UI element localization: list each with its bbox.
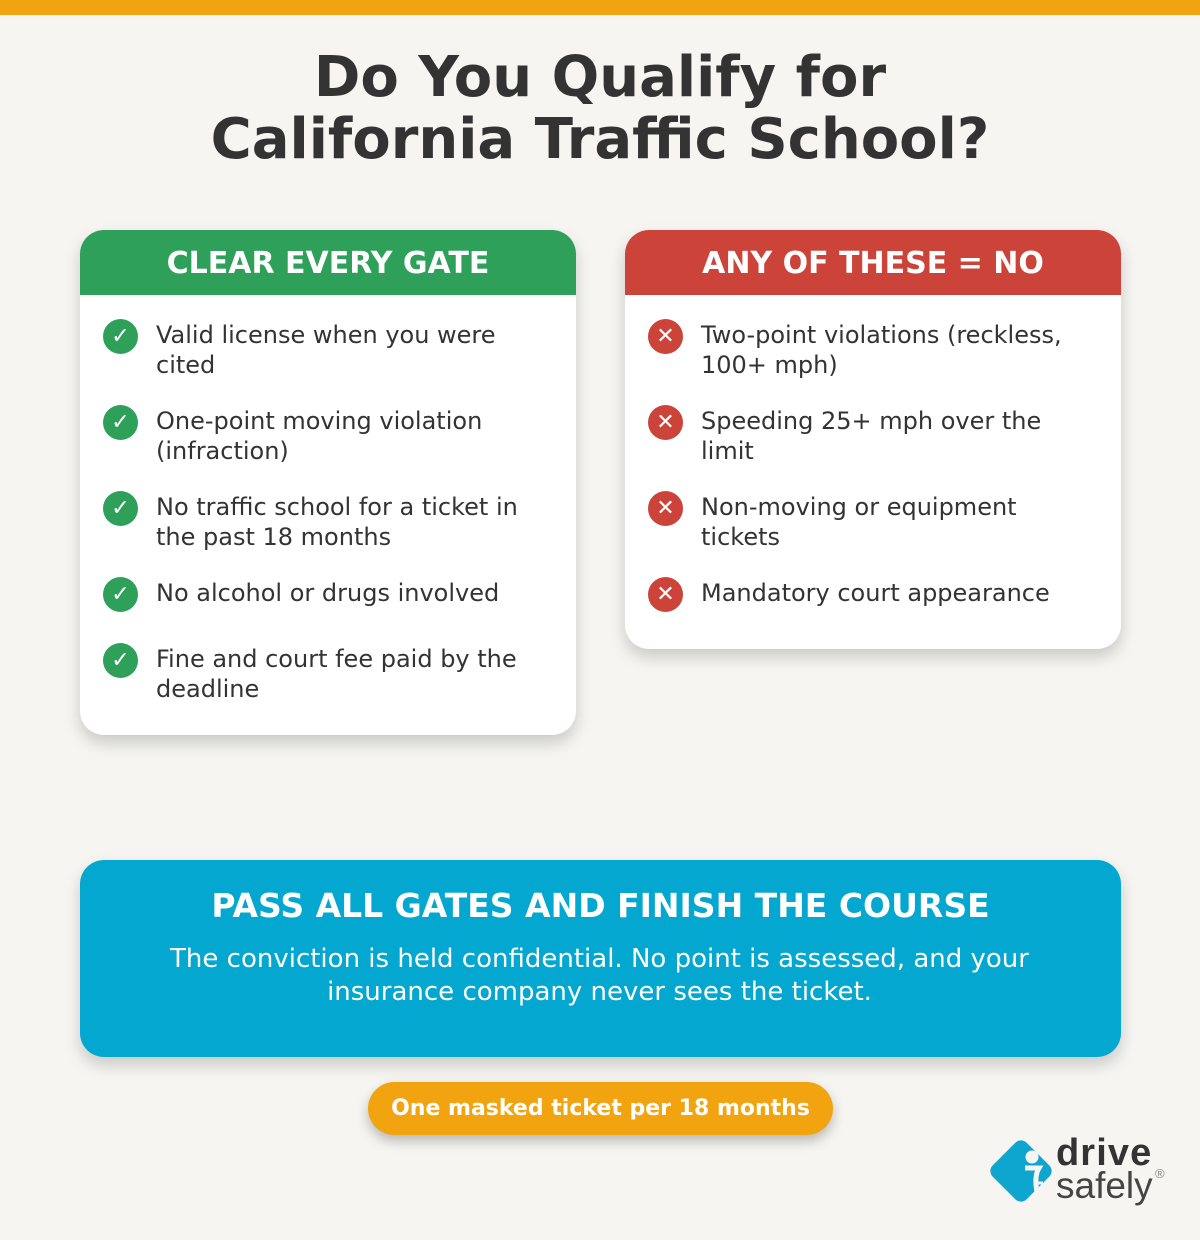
item: non-moving: Non-moving or equipment xyxy=(701,493,1017,521)
item: no alcohol: ✓ xyxy=(111,582,130,607)
item: speeding: limit xyxy=(701,437,754,465)
item: non-moving: tickets xyxy=(701,523,780,551)
item: mandatory court: ✕ xyxy=(656,582,675,607)
panel: clear every gate xyxy=(80,230,576,735)
logo registered mark: ® xyxy=(1155,1166,1165,1181)
item: no traffic school: ✓ xyxy=(111,496,130,521)
title: Do You Qualify for xyxy=(314,45,886,110)
item: valid license: cited xyxy=(156,351,215,379)
item: valid license xyxy=(103,319,496,379)
item: no alcohol: No alcohol or drugs involved xyxy=(156,579,499,607)
panel: any of these = no xyxy=(625,230,1121,649)
item: non-moving: ✕ xyxy=(656,496,675,521)
logo word: safely: safely xyxy=(1056,1165,1153,1206)
item: two-point violations: ✕ xyxy=(656,324,675,349)
banner: pass all gates xyxy=(80,860,1121,1057)
heading: any of these: ANY OF THESE = NO xyxy=(702,246,1044,281)
item: no traffic school: No traffic school for a ticket in xyxy=(156,493,518,521)
item: two-point violations xyxy=(648,319,1062,379)
item: two-point violations: 100+ mph) xyxy=(701,351,838,379)
heading: any of these xyxy=(625,230,1121,295)
item: speeding: Speeding 25+ mph over the xyxy=(701,407,1041,435)
item: speeding: ✕ xyxy=(656,410,675,435)
item: one-point violation: ✓ xyxy=(111,410,130,435)
banner heading: PASS ALL GATES AND FINISH THE COURSE xyxy=(211,886,990,925)
logo: drive safely xyxy=(990,1132,1165,1206)
item: mandatory court xyxy=(648,577,1050,612)
item: fine paid: Fine and court fee paid by the xyxy=(156,645,517,673)
item: fine paid: deadline xyxy=(156,675,259,703)
icon: logo diamond xyxy=(990,1140,1052,1202)
title xyxy=(211,45,989,172)
item: two-point violations: Two-point violations (reckless, xyxy=(701,321,1062,349)
item: speeding xyxy=(648,405,1041,465)
item: valid license: ✓ xyxy=(111,324,130,349)
pill: one masked ticket xyxy=(368,1082,833,1135)
item: fine paid xyxy=(103,643,517,703)
logo word: drive: drive xyxy=(1056,1132,1152,1174)
item: no traffic school xyxy=(103,491,518,551)
banner text: The conviction is held confidential. No point is assessed, and your xyxy=(170,944,1029,974)
banner text: insurance company never sees the ticket. xyxy=(327,977,872,1007)
item: mandatory court: Mandatory court appearance xyxy=(701,579,1050,607)
item: one-point violation xyxy=(103,405,482,465)
heading: clear every gate: CLEAR EVERY GATE xyxy=(167,246,489,281)
top accent bar xyxy=(0,0,1200,15)
item: fine paid: ✓ xyxy=(111,648,130,673)
item: no alcohol xyxy=(103,577,499,612)
item: one-point violation: One-point moving violation xyxy=(156,407,482,435)
item: valid license: Valid license when you were xyxy=(156,321,496,349)
item: one-point violation: (infraction) xyxy=(156,437,289,465)
item: no traffic school: the past 18 months xyxy=(156,523,391,551)
pill: one masked ticket: One masked ticket per 18 months xyxy=(391,1096,810,1121)
title: California Traffic School? xyxy=(211,107,989,172)
banner text xyxy=(170,944,1029,1007)
heading: clear every gate xyxy=(80,230,576,295)
item: non-moving xyxy=(648,491,1017,551)
